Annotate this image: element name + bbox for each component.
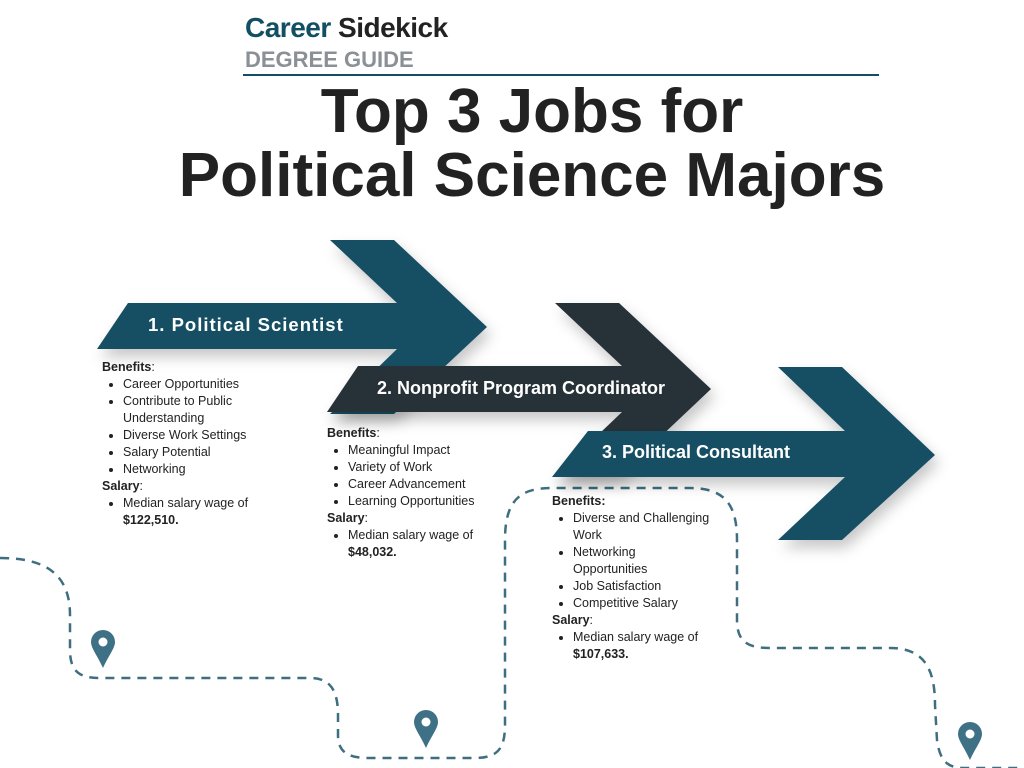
text: job 1 details: Diverse Work Settings: [123, 428, 246, 442]
pin 1: [91, 630, 115, 668]
arrow 1: [97, 240, 487, 414]
text: job 2 details: [327, 426, 474, 559]
text: job 2 details: Meaningful Impact: [348, 443, 450, 457]
pin 3: [958, 722, 982, 760]
text: job 3 details: $107,633.: [573, 647, 629, 661]
text: job 3 details: [552, 494, 709, 661]
arrow 2: [327, 303, 711, 476]
text: job 2 details: Variety of Work: [348, 460, 432, 474]
text: job 3 details: Networking: [573, 545, 636, 559]
text: job 3 details: Job Satisfaction: [573, 579, 661, 593]
text: job 3 details: Competitive Salary: [573, 596, 678, 610]
text: job 1 details: Salary Potential: [123, 445, 211, 459]
text: job 3 details: Work: [573, 528, 602, 542]
arrow label 2: 2. Nonprofit Program Coordinator: [377, 378, 665, 398]
text: job 1 details: Contribute to Public Understanding: [123, 394, 232, 425]
text: job 1 details: Networking: [123, 462, 186, 476]
title: Top 3 Jobs for: [321, 77, 743, 146]
arrow label 1: 1. Political Scientist: [148, 314, 344, 335]
text: job 2 details: Benefits: Salary:: [327, 426, 380, 525]
subtitle: degree guide: DEGREE GUIDE: [245, 47, 414, 72]
title: Political Science Majors: [179, 141, 885, 210]
arrow label 3: 3. Political Consultant: [602, 442, 790, 462]
pin 2: [414, 710, 438, 748]
text: job 1 details: Benefits: Salary:: [102, 360, 155, 493]
text: job 1 details: Career Opportunities: [123, 377, 239, 391]
dashed route: [0, 488, 1024, 768]
text: job 1 details: [102, 360, 248, 527]
logo: Career Sidekick: [245, 12, 448, 43]
title: [179, 77, 885, 210]
text: job 3 details: Opportunities: [573, 562, 647, 576]
text: job 3 details: Benefits: Salary:: [552, 494, 605, 627]
text: job 3 details: Diverse and Challenging: [573, 511, 709, 525]
text: job 2 details: Career Advancement: [348, 477, 465, 491]
text: job 3 details: Median salary wage of: [573, 630, 698, 644]
text: job 1 details: Median salary wage of $122,510.: [123, 496, 248, 527]
text: job 2 details: Median salary wage of $48,032.: [348, 528, 473, 559]
text: job 2 details: Learning Opportunities: [348, 494, 474, 508]
arrow 3: [552, 367, 935, 540]
